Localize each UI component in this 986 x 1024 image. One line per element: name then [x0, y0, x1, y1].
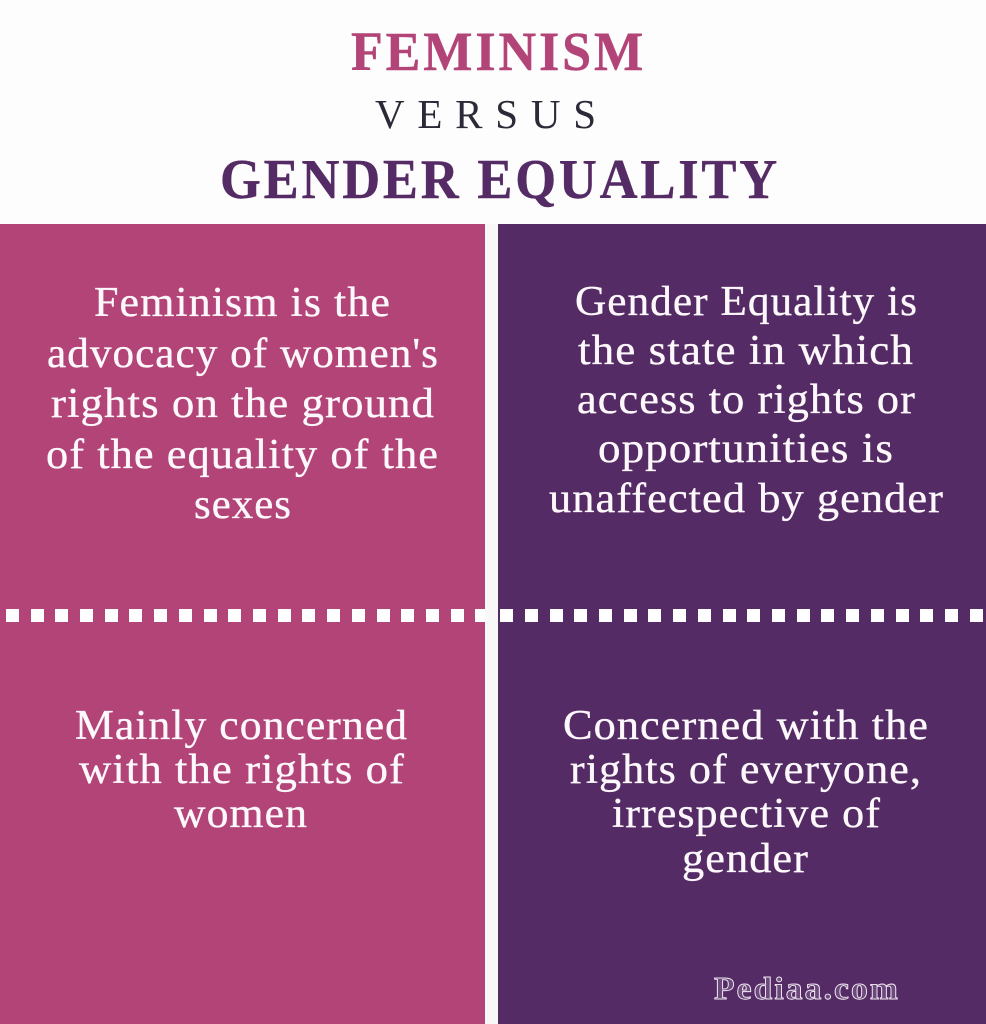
text block: feminism definition: advocacy of women's — [47, 331, 439, 377]
text block: gender equality concern — [563, 703, 929, 882]
text block: gender equality concern: rights of everyone, — [570, 747, 922, 793]
heading: versus: VERSUS — [375, 91, 596, 137]
title — [220, 21, 780, 211]
logo: Pediaa.com: Pediaa.com — [714, 970, 900, 1006]
text block: gender equality definition — [549, 279, 944, 522]
heading: Feminism: FEMINISM — [351, 21, 646, 82]
text block: feminism definition: Feminism is the — [94, 280, 391, 326]
text block: gender equality definition: unaffected by gender — [549, 476, 944, 522]
text block: gender equality concern: gender — [682, 836, 809, 882]
text block: gender equality definition: opportunities is — [598, 426, 894, 472]
text block: feminism concern: Mainly concerned — [75, 703, 408, 749]
panel: feminism — [0, 224, 485, 1024]
heading: Gender Equality: GENDER EQUALITY — [220, 149, 780, 211]
text block: gender equality definition: access to rights or — [577, 377, 916, 423]
text block: feminism definition: sexes — [194, 482, 292, 528]
text block: gender equality definition: the state in which — [578, 328, 914, 374]
text block: gender equality concern: Concerned with the — [563, 703, 929, 749]
text block: feminism concern: women — [174, 791, 308, 837]
text block: gender equality definition: Gender Equality is — [575, 279, 918, 325]
text block: feminism definition: rights on the ground — [51, 381, 435, 427]
text block: feminism concern: with the rights of — [79, 747, 405, 793]
text block: gender equality concern: irrespective of — [612, 791, 881, 837]
panel: gender equality — [498, 224, 986, 1024]
text block: feminism definition — [46, 280, 439, 528]
dotted divider — [6, 609, 983, 622]
text block: feminism definition: of the equality of the — [46, 432, 439, 478]
text block: feminism concern — [75, 703, 408, 837]
